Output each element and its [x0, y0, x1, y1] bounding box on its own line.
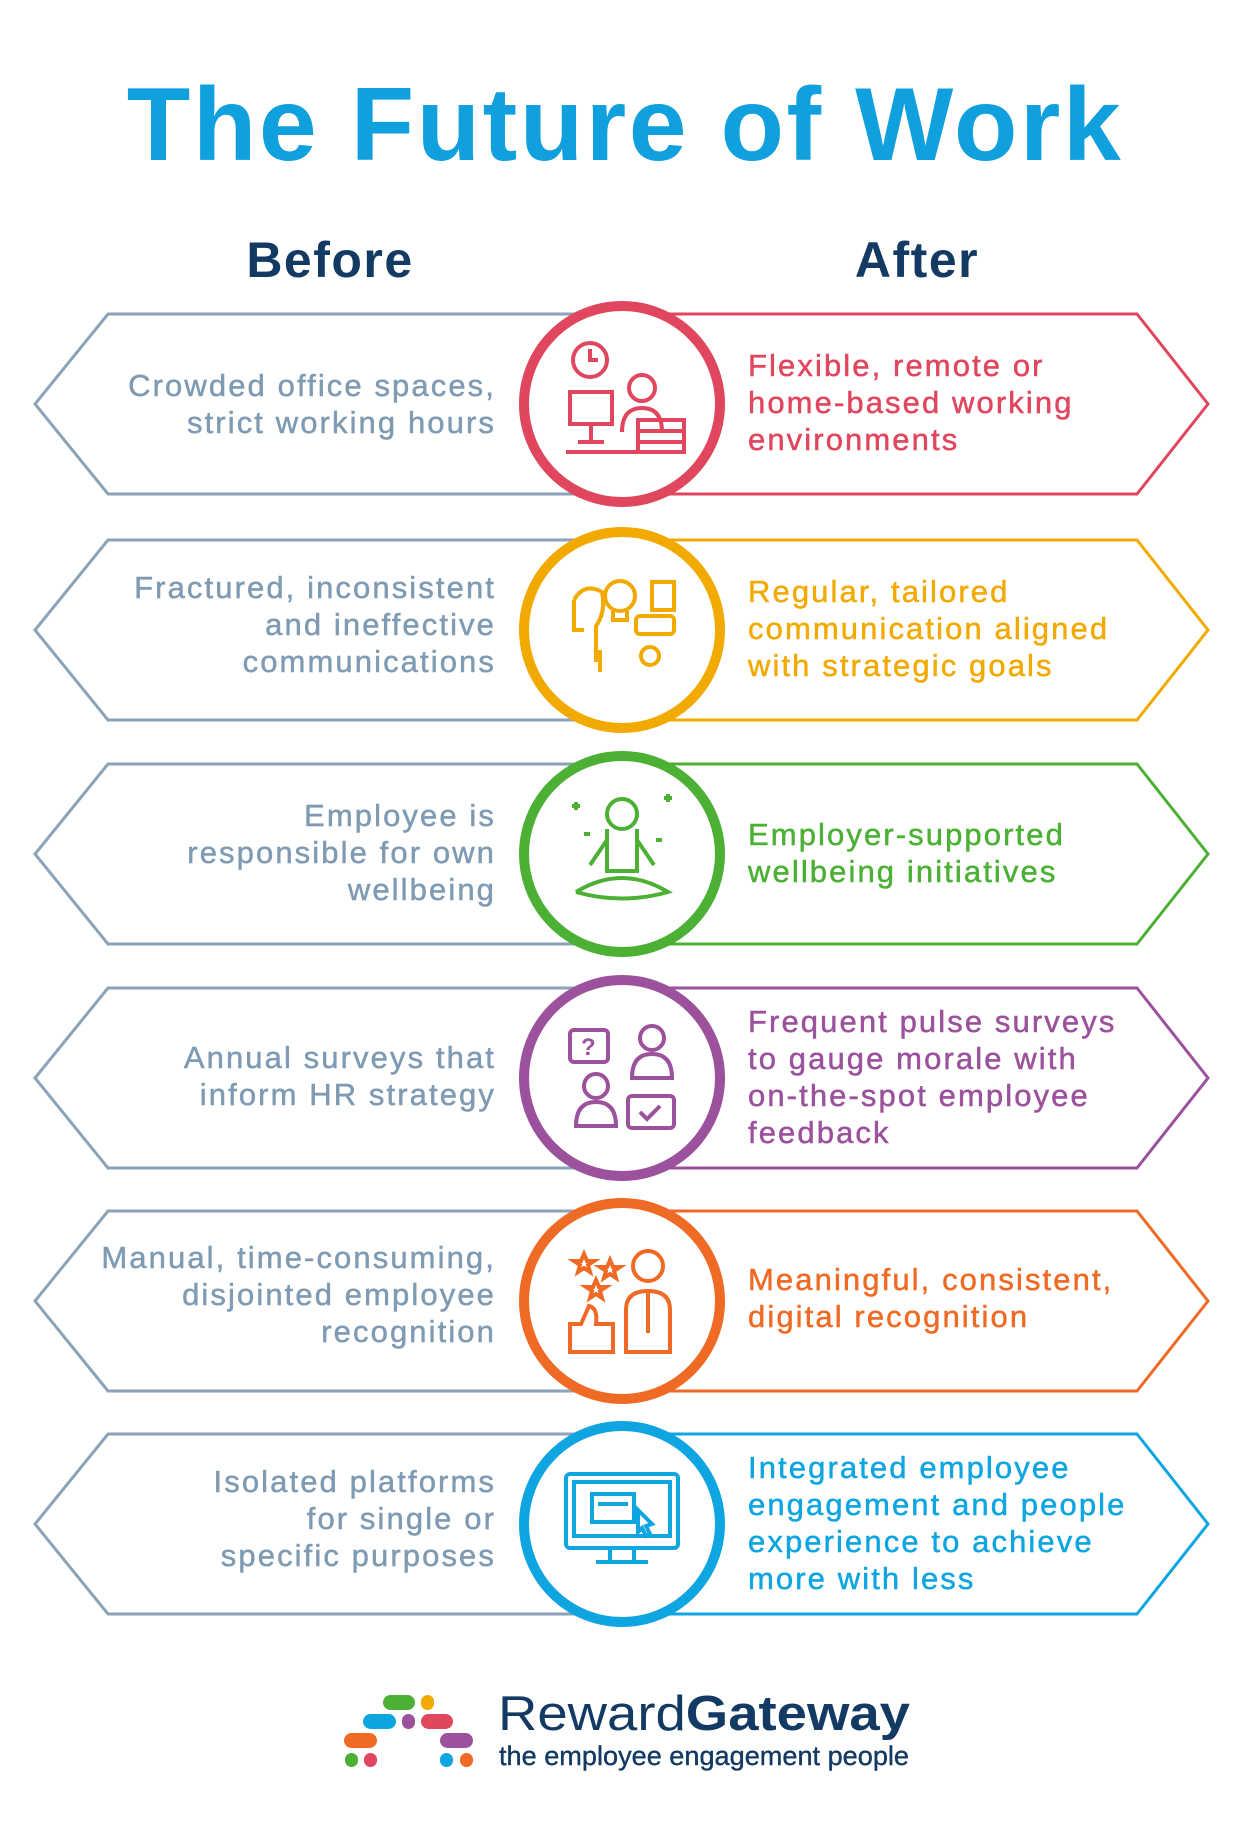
right box: [622, 1434, 1208, 1614]
row 6: platforms: [35, 1426, 1208, 1622]
after text: Integrated employee: [748, 1450, 1071, 1485]
icon circle: [524, 756, 720, 952]
icon circle: [524, 532, 720, 728]
after text: home-based working: [748, 385, 1074, 420]
after text: on-the-spot employee: [748, 1078, 1090, 1113]
after text: engagement and people: [748, 1487, 1127, 1522]
before text: Employee is: [304, 798, 496, 833]
right box: [622, 540, 1208, 720]
left box: [35, 314, 622, 494]
after text: feedback: [748, 1115, 891, 1150]
after text: experience to achieve: [748, 1524, 1094, 1559]
before text: Isolated platforms: [214, 1464, 496, 1499]
icon circle: [524, 1426, 720, 1622]
left box: [35, 764, 622, 944]
before text: for single or: [307, 1501, 496, 1536]
row 5: recognition: [35, 1203, 1208, 1399]
before text: recognition: [321, 1314, 496, 1349]
before text: wellbeing: [347, 872, 496, 907]
row 2: communication: [35, 532, 1208, 728]
after text: more with less: [748, 1561, 976, 1596]
icon circle: ?: [581, 1034, 596, 1061]
before text: specific purposes: [221, 1538, 496, 1573]
before text: disjointed employee: [182, 1277, 496, 1312]
before text: inform HR strategy: [200, 1077, 496, 1112]
before text: Fractured, inconsistent: [134, 570, 496, 605]
after text: Flexible, remote or: [748, 348, 1045, 383]
before text: and ineffective: [265, 607, 496, 642]
after text: to gauge morale with: [748, 1041, 1078, 1076]
logo mark: [344, 1695, 473, 1767]
logo tagline: the employee engagement people: [499, 1741, 909, 1771]
left box: [35, 540, 622, 720]
right box: [622, 764, 1208, 944]
after text: with strategic goals: [747, 648, 1054, 683]
right box: [622, 988, 1208, 1168]
logo: [344, 1687, 910, 1771]
left box: [35, 988, 622, 1168]
icon circle: [524, 980, 720, 1176]
icon circle: [524, 1203, 720, 1399]
icon circle: [524, 306, 720, 502]
before text: Annual surveys that: [184, 1040, 496, 1075]
right box: [622, 314, 1208, 494]
after text: Frequent pulse surveys: [748, 1004, 1116, 1039]
before text: strict working hours: [187, 405, 496, 440]
after text: environments: [748, 422, 959, 457]
after text: communication aligned: [748, 611, 1109, 646]
heading: after: After: [855, 232, 979, 288]
right box: [622, 1211, 1208, 1391]
title: The Future of Work: [127, 67, 1123, 183]
before text: responsible for own: [187, 835, 496, 870]
before text: Manual, time-consuming,: [101, 1240, 496, 1275]
after text: Meaningful, consistent,: [748, 1262, 1113, 1297]
after text: digital recognition: [748, 1299, 1029, 1334]
before text: Crowded office spaces,: [128, 368, 496, 403]
heading: before: Before: [246, 232, 414, 288]
after text: Regular, tailored: [748, 574, 1009, 609]
before text: communications: [243, 644, 496, 679]
left box: [35, 1211, 622, 1391]
left box: [35, 1434, 622, 1614]
row 4: surveys: [35, 980, 1208, 1176]
logo wordmark: Reward Gateway: [498, 1687, 910, 1741]
row 1: workplace: [35, 306, 1208, 502]
after text: wellbeing initiatives: [747, 854, 1057, 889]
after text: Employer-supported: [748, 817, 1065, 852]
row 3: wellbeing: [35, 756, 1208, 952]
